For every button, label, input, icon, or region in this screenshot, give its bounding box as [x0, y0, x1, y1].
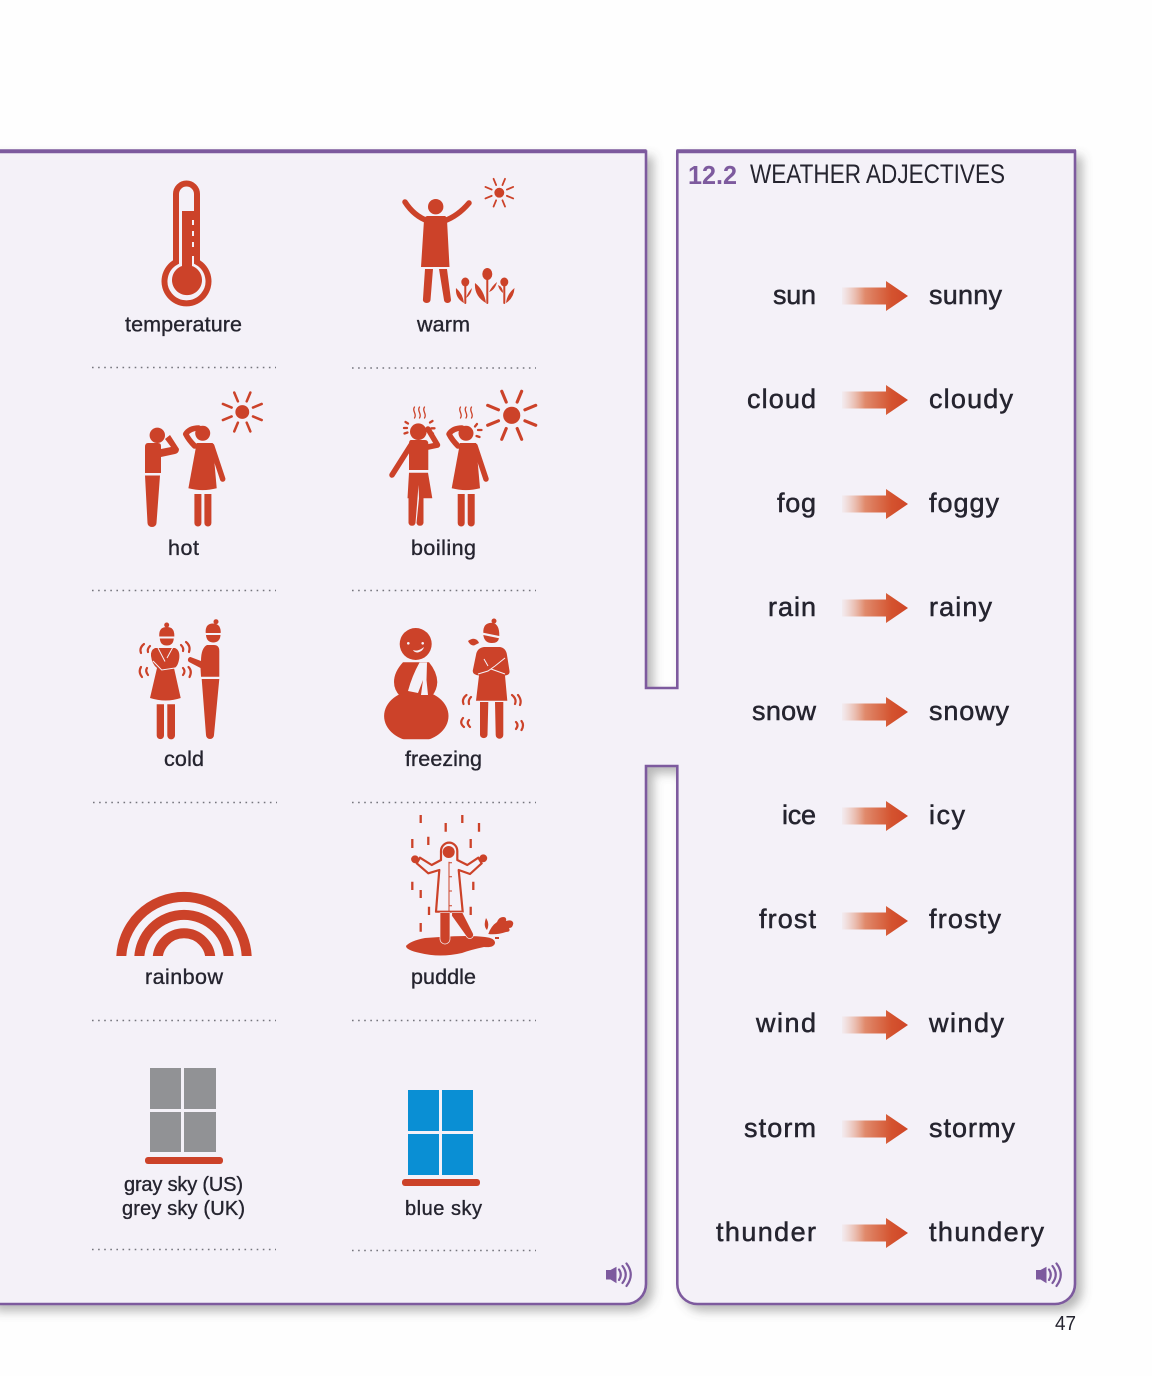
row: rain to rainy: rainy — [929, 592, 992, 622]
label: puddle: puddle — [411, 965, 476, 989]
icon: boiling — [392, 391, 536, 526]
row: sun to sunny: sun — [773, 280, 816, 310]
label: cold: cold — [164, 747, 204, 771]
row: storm to stormy: storm — [744, 1113, 816, 1143]
row: wind to windy — [755, 1008, 1004, 1040]
row: thunder to thundery: thunder — [716, 1217, 816, 1247]
woman — [186, 426, 223, 526]
row: thunder to thundery — [716, 1217, 1044, 1248]
row: cloud to cloudy: cloud — [747, 384, 816, 414]
row: snow to snowy: snow — [752, 696, 816, 726]
row: frost to frosty: frosty — [929, 904, 1002, 934]
icon: gray sky window — [145, 1068, 223, 1164]
page number: 47 — [1055, 1313, 1076, 1335]
heading: 12.2 weather adjectives: WEATHER ADJECTIVES — [750, 159, 1005, 189]
row: storm to stormy — [744, 1113, 1016, 1144]
label: hot: hot — [168, 536, 199, 560]
row: thunder to thundery: thundery — [929, 1217, 1044, 1247]
icon: hot — [145, 393, 262, 527]
heading: 12.2 weather adjectives — [688, 159, 1005, 190]
label: gray sky / grey sky: gray sky (US) — [124, 1174, 243, 1196]
icon: cold — [140, 619, 221, 739]
row: ice to icy — [782, 800, 966, 831]
row: fog to foggy: fog — [777, 488, 816, 518]
panels: weather vocabulary and adjectives — [0, 151, 1076, 1304]
label: blue sky: blue sky — [405, 1198, 482, 1220]
label: freezing: freezing — [405, 747, 482, 771]
icon: blue sky window — [402, 1090, 480, 1186]
row: sun to sunny: sunny — [929, 280, 1002, 310]
label: gray sky / grey sky — [122, 1174, 245, 1220]
row: rain to rainy — [768, 592, 992, 623]
row: ice to icy: ice — [782, 800, 816, 830]
row: cloud to cloudy: cloudy — [929, 384, 1014, 414]
icon: freezing — [384, 618, 523, 742]
row: frost to frosty: frost — [759, 904, 816, 934]
row: fog to foggy — [777, 488, 1000, 519]
row: frost to frosty — [759, 904, 1002, 936]
row: cloud to cloudy — [747, 384, 1014, 415]
woman — [449, 426, 486, 526]
heading: 12.2 weather adjectives: 12.2 — [688, 160, 737, 190]
row: wind to windy: windy — [928, 1008, 1004, 1038]
row: wind to windy: wind — [755, 1008, 816, 1038]
icon: puddle — [406, 815, 513, 956]
label: boiling: boiling — [411, 536, 476, 560]
row: storm to stormy: stormy — [929, 1113, 1016, 1143]
row: sun to sunny — [773, 280, 1002, 311]
label: temperature: temperature — [125, 312, 242, 336]
row: rain to rainy: rain — [768, 592, 816, 622]
icon: audio left — [606, 1264, 631, 1286]
icon: rainbow — [116, 892, 252, 956]
icon: audio right — [1036, 1264, 1061, 1286]
label: rainbow: rainbow — [145, 965, 223, 989]
icon: thermometer — [165, 184, 209, 303]
label: gray sky / grey sky: grey sky (UK) — [122, 1198, 245, 1220]
row: fog to foggy: foggy — [929, 488, 1000, 518]
row: snow to snowy: snowy — [929, 696, 1010, 726]
icon: warm — [405, 179, 514, 303]
label: warm: warm — [416, 312, 470, 336]
row: ice to icy: icy — [929, 800, 966, 830]
row: snow to snowy — [752, 696, 1010, 727]
